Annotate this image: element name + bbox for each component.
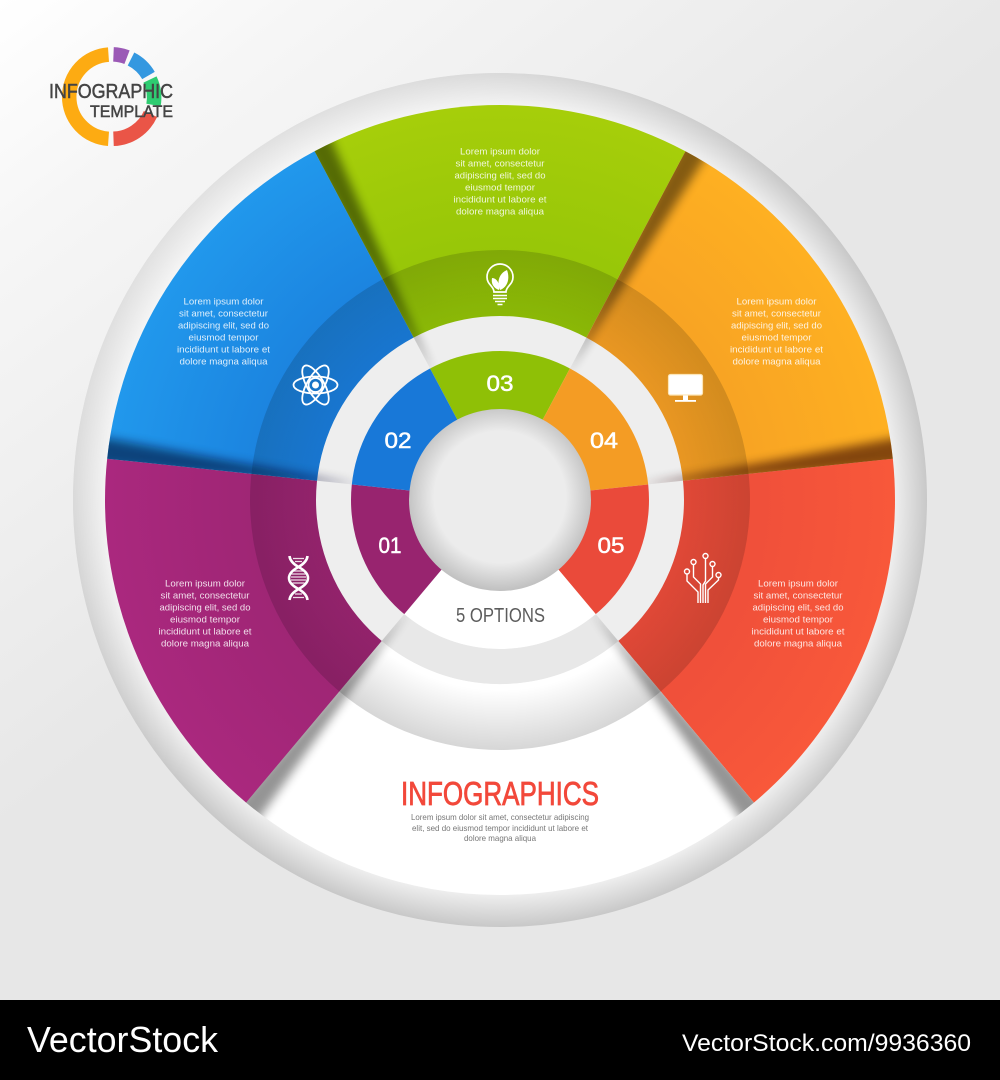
text block: option 03: Lorem ipsum dolor [460, 146, 540, 158]
text block: option 01: Lorem ipsum dolor [165, 578, 245, 590]
text block: option 04: adipiscing elit, sed do [731, 320, 822, 332]
text block: option 03: dolore magna aliqua [456, 206, 545, 218]
text block: option 02: adipiscing elit, sed do [178, 320, 269, 332]
logo wordmark: TEMPLATE [90, 103, 173, 121]
title: infographics: INFOGRAPHICS [401, 775, 599, 812]
sector edge shadows [82, 119, 918, 835]
text block: option 01: eiusmod tempor [170, 614, 240, 626]
sector: orange option 04 [500, 151, 893, 500]
number 05: 05 [598, 533, 624, 558]
sector: purple option 01 [105, 459, 500, 803]
dark translucent ring band [250, 250, 750, 750]
footer bar [0, 1000, 1000, 1080]
logo: infographic template [49, 54, 173, 139]
text block: option 01: dolore magna aliqua [161, 638, 250, 650]
icon: monitor [668, 374, 702, 402]
text block: option 03: sit amet, consectetur [456, 158, 544, 170]
text block: option 02: sit amet, consectetur [179, 308, 268, 320]
text block: option 04: sit amet, consectetur [732, 308, 821, 320]
icon: DNA helix [289, 556, 308, 600]
text block: option 05: adipiscing elit, sed do [752, 602, 844, 614]
text block: option 01: adipiscing elit, sed do [160, 602, 250, 614]
icon: light bulb with leaf [487, 264, 513, 304]
text block: option 01 [158, 578, 252, 650]
logo wordmark: INFOGRAPHIC [49, 80, 173, 103]
logo donut segments [69, 54, 154, 139]
text block: option 04: incididunt ut labore et [730, 344, 823, 356]
text block: option 01: sit amet, consectetur [160, 590, 250, 602]
text block: option 05: incididunt ut labore et [752, 626, 845, 638]
text block: option 02 [177, 296, 270, 368]
light grey middle ring [316, 316, 684, 684]
number 03: 03 [486, 371, 514, 396]
sector: blue option 02 [107, 151, 500, 500]
text block: title description: dolore magna aliqua [464, 833, 536, 843]
text block: option 02: Lorem ipsum dolor [184, 296, 264, 308]
text block: option 05: dolore magna aliqua [754, 638, 843, 650]
sector: green option 03 [315, 105, 685, 500]
text block: option 04: dolore magna aliqua [732, 356, 821, 368]
text block: option 04 [730, 296, 823, 368]
text block: option 03: eiusmod tempor [465, 182, 535, 194]
number 01: 01 [378, 533, 402, 558]
text block: option 02: eiusmod tempor [188, 332, 258, 344]
text block: option 04: Lorem ipsum dolor [736, 296, 816, 308]
text block: title description [411, 812, 589, 843]
sector: red option 05 [500, 459, 895, 803]
footer brand: VectorStock [27, 1019, 219, 1060]
text block: option 03: adipiscing elit, sed do [454, 170, 546, 182]
text block: option 01: incididunt ut labore et [158, 626, 252, 638]
text block: option 05 [752, 578, 845, 650]
text block: option 03 [454, 146, 547, 218]
sector: white title area [246, 500, 754, 895]
logo wordmark [49, 80, 173, 121]
text block: option 05: eiusmod tempor [763, 614, 833, 626]
text block: option 03: incididunt ut labore et [454, 194, 547, 206]
footer image id: VectorStock.com/9936360 [682, 1030, 971, 1057]
number 02: 02 [384, 428, 412, 453]
centre label: 5 options: 5 OPTIONS [456, 605, 545, 627]
text block: option 05: sit amet, consectetur [754, 590, 842, 602]
text block: option 02: incididunt ut labore et [177, 344, 270, 356]
icon: circuit tree [684, 554, 721, 603]
central circle [409, 409, 591, 591]
text block: option 05: Lorem ipsum dolor [758, 578, 838, 590]
text block: title description: Lorem ipsum dolor sit amet, consectetur adipiscing [411, 812, 589, 822]
text block: option 04: eiusmod tempor [742, 332, 812, 344]
number 04: 04 [590, 428, 618, 453]
icon: atom [294, 362, 338, 408]
text block: option 02: dolore magna aliqua [180, 356, 268, 368]
outer grey ring [73, 73, 927, 927]
text block: title description: elit, sed do eiusmod tempor incididunt ut labore et [412, 823, 589, 833]
